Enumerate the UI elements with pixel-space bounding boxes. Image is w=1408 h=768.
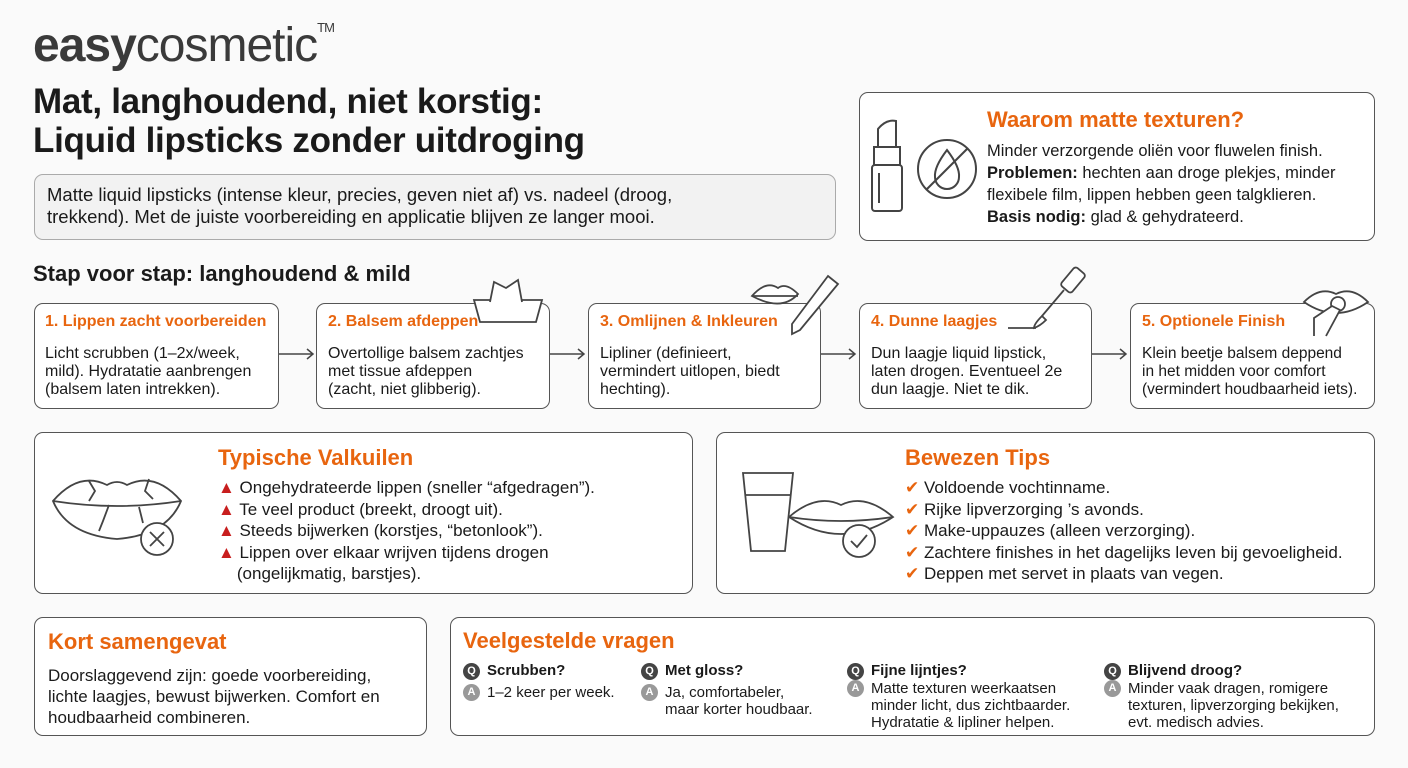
panel: bewezen tips: ✔ Rijke lipverzorging ’s avonds.: [905, 500, 1144, 518]
faq 2: maar korter houdbaar.: [665, 701, 813, 718]
faq 4: Minder vaak dragen, romigere: [1128, 680, 1328, 697]
faq 2: Q: [645, 665, 654, 677]
faq 4: evt. medisch advies.: [1128, 714, 1264, 731]
title: [33, 82, 585, 160]
panel: bewezen tips: ✔ Zachtere finishes in het dagelijks leven bij gevoeligheid.: [905, 542, 1343, 562]
text: Bewezen Tips: [905, 445, 1050, 470]
panel: veelgestelde vragen: [450, 617, 1375, 736]
arrow: [821, 348, 856, 360]
title: Liquid lipsticks zonder uitdroging: [33, 121, 585, 160]
faq 1: Scrubben?: [487, 662, 565, 679]
panel: kort samengevat: [34, 617, 427, 736]
step 3: vermindert uitlopen, biedt: [600, 363, 780, 380]
faq 1: 1–2 keer per week.: [487, 684, 615, 701]
step 5: [1130, 303, 1375, 409]
step 2: Overtollige balsem zachtjes: [328, 345, 524, 362]
faq 4: [1104, 662, 1339, 731]
panel: typische valkuilen: ▲ Steeds bijwerken (korstjes, “betonlook”).: [218, 521, 543, 540]
intro box: Matte liquid lipsticks (intense kleur, precies, geven niet af) vs. nadeel (droog,: [47, 184, 672, 205]
icon: tissue: [472, 278, 544, 323]
title: Mat, langhoudend, niet korstig:: [33, 82, 543, 121]
step 3: Lipliner (definieert,: [600, 345, 732, 362]
icon: lipstick: [871, 120, 977, 212]
faq 3: Hydratatie & lipliner helpen.: [871, 714, 1054, 731]
faq 2: Ja, comfortabeler,: [665, 684, 784, 701]
panel: kort samengevat: Doorslaggevend zijn: goede voorbereiding, lichte laagjes, bewust bijwerken. Comfort en houdbaarheid combineren.: [48, 666, 380, 727]
arrow: [279, 348, 314, 360]
panel: waarom matte texturen: flexibele film, lippen hebben geen talgklieren.: [987, 186, 1316, 204]
faq 1: Q: [467, 665, 476, 677]
faq 4: Blijvend droog?: [1128, 662, 1242, 679]
faq 3: Q: [851, 665, 860, 677]
faq 1: [463, 662, 615, 701]
logo: easycosmeticTM: [33, 19, 334, 72]
panel: kort samengevat: Kort samengevat: [48, 629, 227, 654]
icon: applicator: [1008, 266, 1086, 330]
step 4: Dun laagje liquid lipstick,: [871, 345, 1046, 362]
step 4: laten drogen. Eventueel 2e: [871, 363, 1062, 380]
faq 3: minder licht, dus zichtbaarder.: [871, 697, 1070, 714]
icon: cracked lips: [52, 478, 182, 556]
step 2: [316, 303, 550, 409]
step 5: in het midden voor comfort: [1142, 363, 1326, 380]
text: Typische Valkuilen: [218, 445, 413, 470]
step 1: Licht scrubben (1–2x/week,: [45, 345, 240, 362]
panel: bewezen tips: ✔ Make-uppauzes (alleen verzorging).: [905, 521, 1195, 540]
panel: bewezen tips: ✔ Voldoende vochtinname.: [905, 478, 1110, 497]
step 2: (zacht, niet glibberig).: [328, 381, 481, 398]
step 1: 1. Lippen zacht voorbereiden: [45, 313, 266, 330]
icon: lips with finger: [1302, 290, 1370, 336]
icon: glass and lips: [742, 472, 894, 558]
panel: typische valkuilen: ▲ Te veel product (breekt, droogt uit).: [218, 500, 503, 518]
faq 2: [641, 662, 813, 718]
faq 2: A: [646, 686, 653, 698]
step 4: dun laagje. Niet te dik.: [871, 381, 1029, 398]
faq 3: Fijne lijntjes?: [871, 662, 967, 679]
step 4: [859, 303, 1092, 409]
step 5: Klein beetje balsem deppend: [1142, 345, 1342, 362]
step 5: 5. Optionele Finish: [1142, 313, 1285, 330]
step 1: [34, 303, 279, 409]
faq 2: Met gloss?: [665, 662, 743, 679]
panel: veelgestelde vragen: Veelgestelde vragen: [463, 628, 675, 653]
faq 3: A: [852, 682, 859, 694]
step 2: met tissue afdeppen: [328, 363, 472, 380]
panel: typische valkuilen: [34, 432, 693, 594]
faq 4: texturen, lipverzorging bekijken,: [1128, 697, 1339, 714]
panel: waarom matte texturen: Problemen: hechten aan droge plekjes, minder: [987, 164, 1336, 182]
faq 3: [847, 662, 1070, 731]
arrow: [1092, 348, 1128, 360]
intro box: trekkend). Met de juiste voorbereiding en applicatie blijven ze langer mooi.: [47, 206, 655, 227]
faq 4: A: [1109, 682, 1116, 694]
panel: typische valkuilen: (ongelijkmatig, barstjes).: [237, 564, 421, 583]
step 1: mild). Hydratatie aanbrengen: [45, 363, 251, 380]
heading: stap voor stap: Stap voor stap: langhoudend & mild: [33, 261, 411, 286]
panel: waarom matte texturen: [859, 92, 1375, 241]
step 4: 4. Dunne laagjes: [871, 313, 997, 330]
intro box: [34, 174, 836, 240]
arrow: [550, 348, 586, 360]
icon: lips and pencil: [750, 274, 840, 336]
panel: bewezen tips: ✔ Deppen met servet in plaats van vegen.: [905, 564, 1224, 583]
step 3: hechting).: [600, 381, 670, 398]
text: Waarom matte texturen?: [987, 107, 1244, 132]
panel: waarom matte texturen: Basis nodig: glad & gehydrateerd.: [987, 208, 1244, 226]
step 5: (vermindert houdbaarheid iets).: [1142, 381, 1357, 398]
step 1: (balsem laten intrekken).: [45, 381, 220, 398]
faq 4: Q: [1108, 665, 1117, 677]
step 3: [588, 303, 821, 409]
faq 1: A: [468, 686, 475, 698]
step 3: 3. Omlijnen & Inkleuren: [600, 313, 778, 330]
panel: typische valkuilen: ▲ Lippen over elkaar wrijven tijdens drogen: [218, 542, 549, 562]
step 2: 2. Balsem afdeppen: [328, 313, 478, 330]
faq 3: Matte texturen weerkaatsen: [871, 680, 1056, 697]
panel: typische valkuilen: ▲ Ongehydrateerde lippen (sneller “afgedragen”).: [218, 478, 595, 497]
panel: bewezen tips: [716, 432, 1375, 594]
panel: waarom matte texturen: Minder verzorgende oliën voor fluwelen finish.: [987, 142, 1323, 160]
